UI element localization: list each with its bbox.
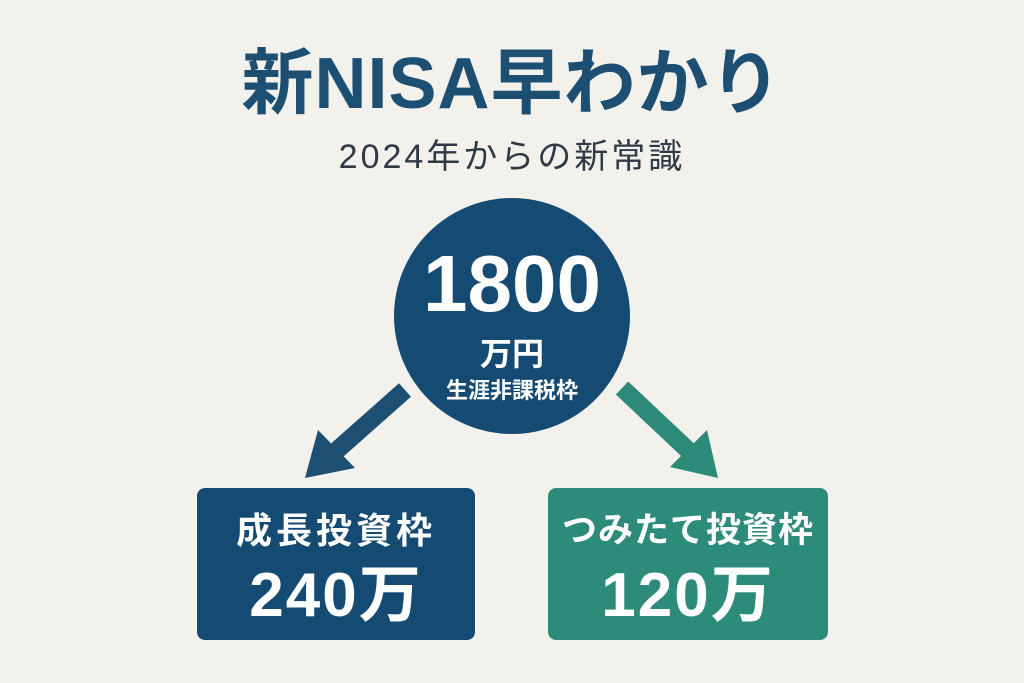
label: 生涯非課税枠 bbox=[446, 378, 578, 403]
number 1800: 1800 bbox=[423, 239, 601, 328]
subtitle: 2024年からの新常識 bbox=[339, 138, 685, 176]
arrow: right bbox=[622, 388, 718, 478]
box amount: 120万 bbox=[601, 561, 775, 630]
arrow: left bbox=[305, 390, 405, 478]
box: tsumitate investment bbox=[548, 488, 828, 640]
unit: 万円 bbox=[480, 336, 544, 372]
box heading: 成長投資枠 bbox=[236, 510, 436, 551]
box amount: 240万 bbox=[249, 561, 423, 630]
title: 新NISA早わかり bbox=[241, 44, 783, 124]
box: growth investment bbox=[197, 488, 475, 640]
circle: total tax-free limit bbox=[394, 198, 630, 434]
box heading: つみたて投資枠 bbox=[562, 511, 814, 550]
